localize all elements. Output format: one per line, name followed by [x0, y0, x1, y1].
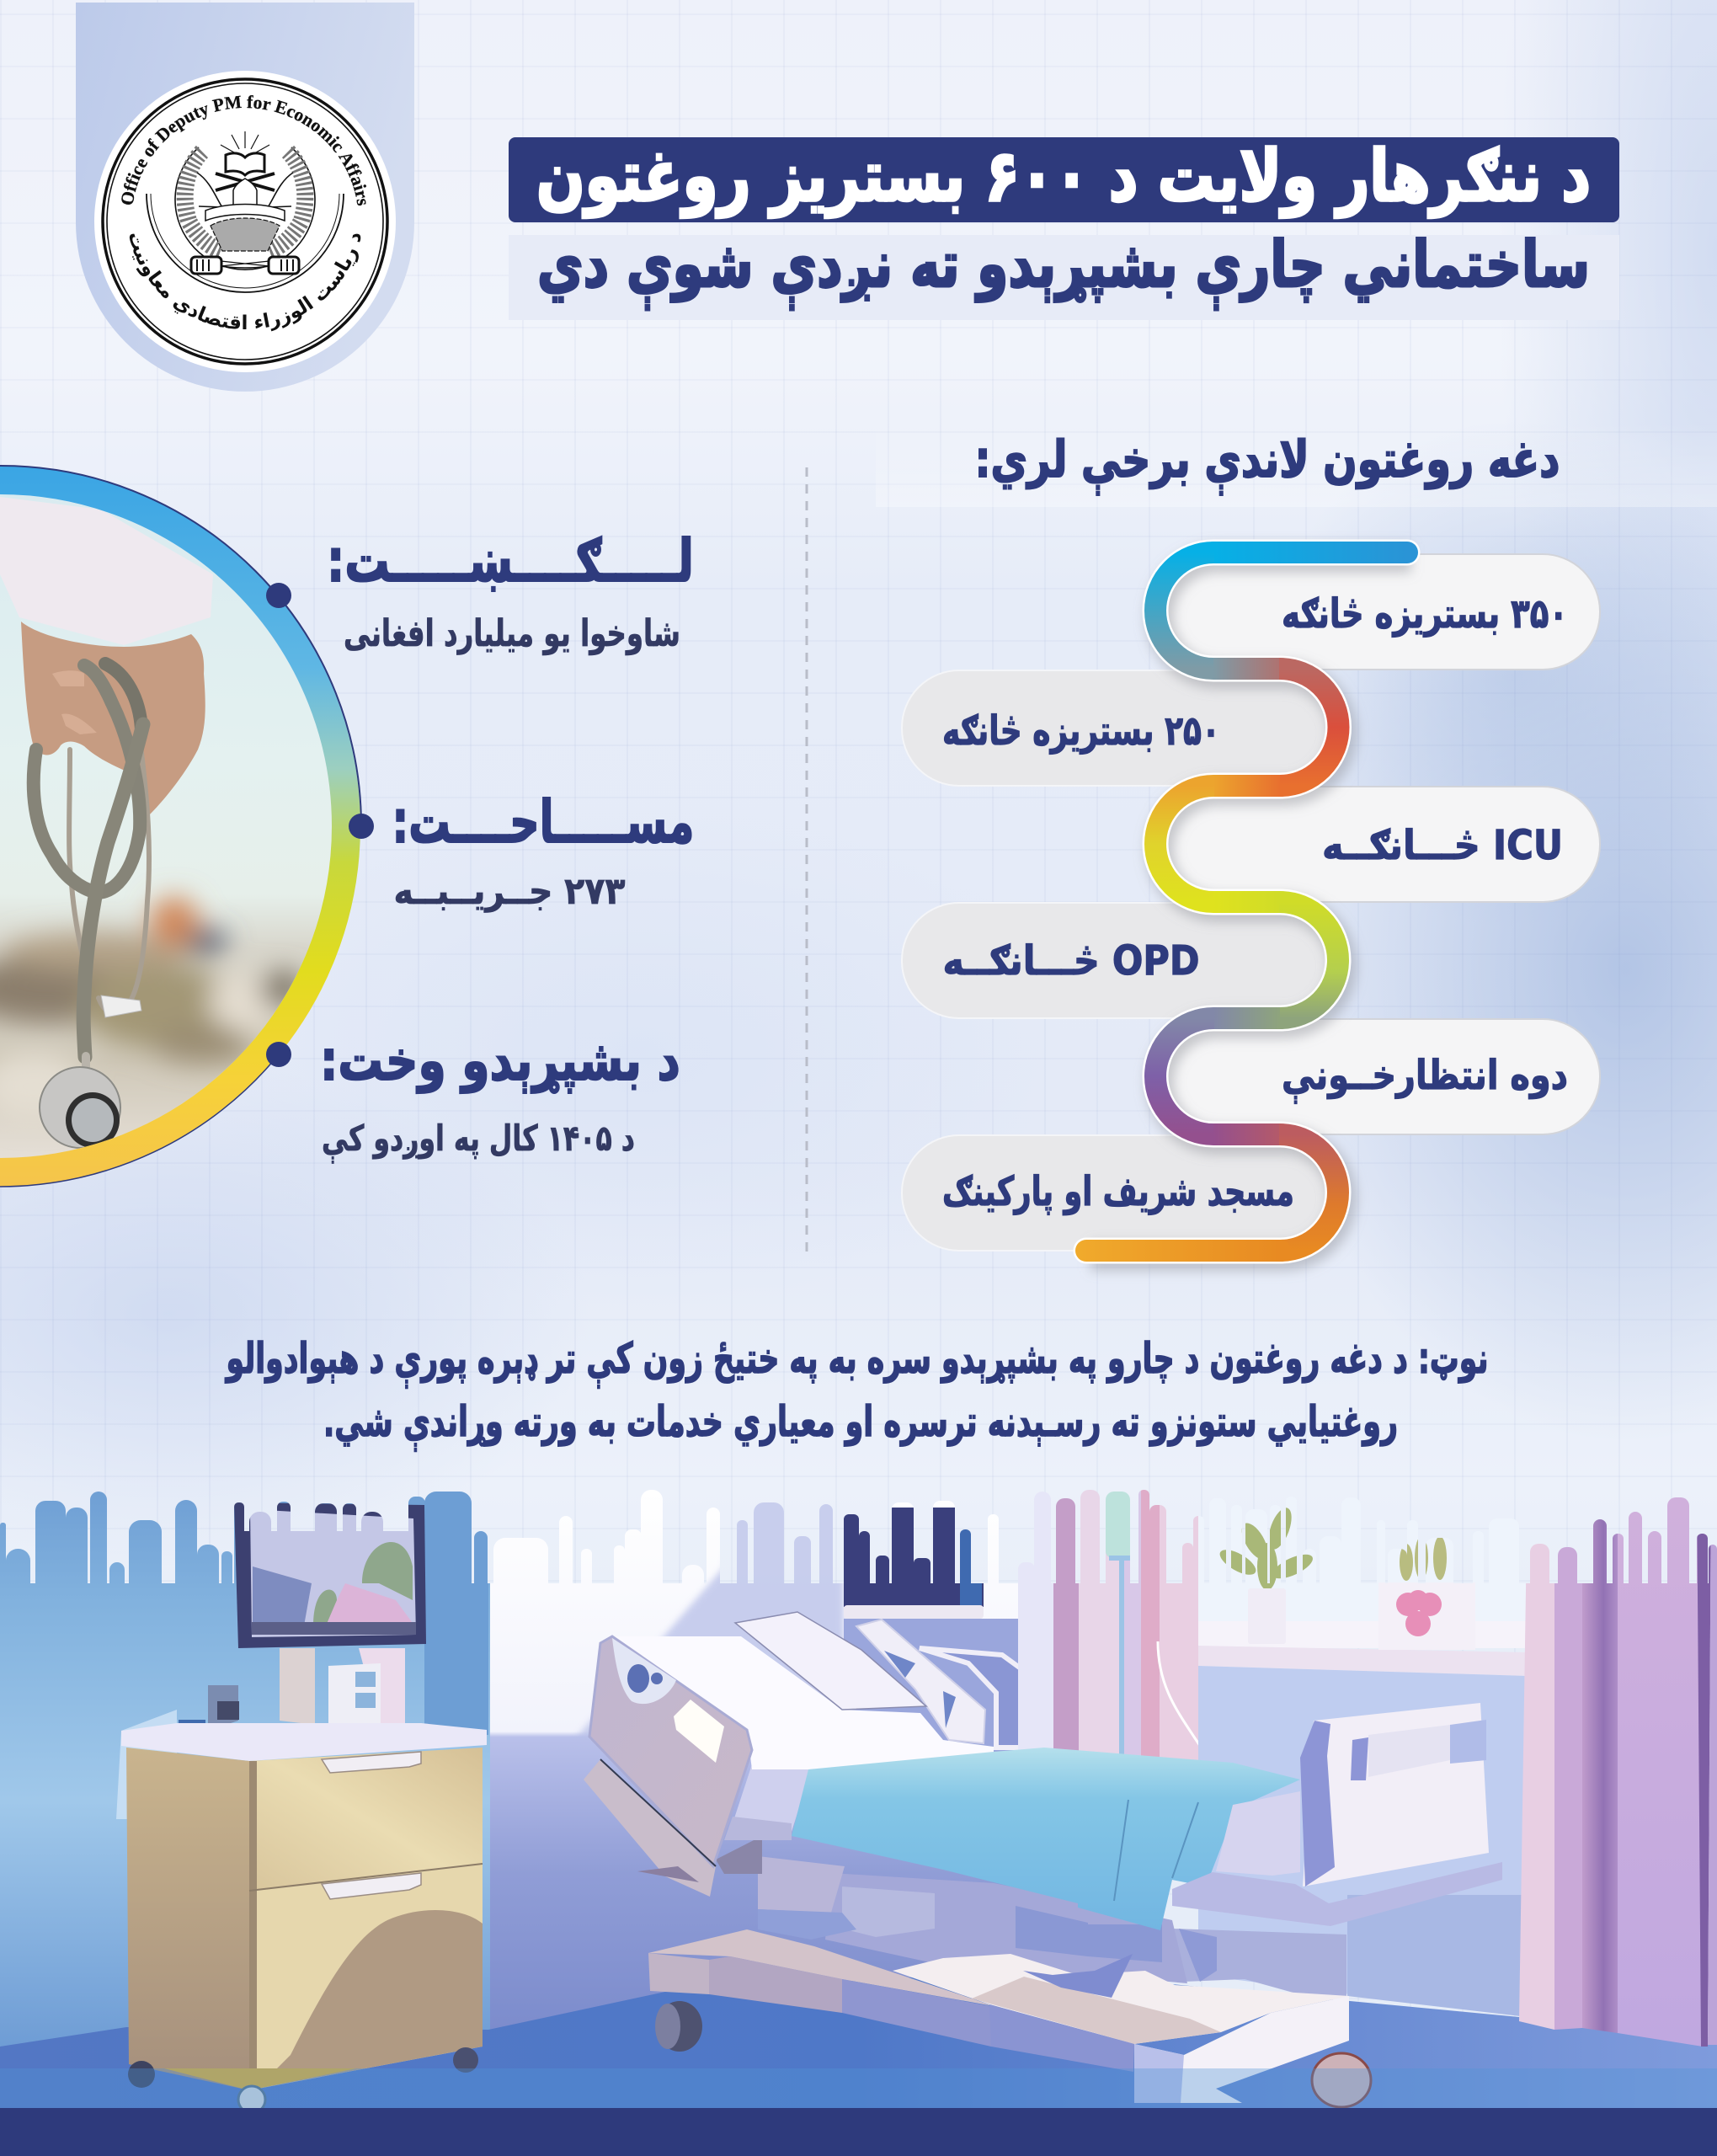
- pill 5: [1162, 1019, 1600, 1134]
- head oval buttons: [627, 1664, 663, 1693]
- hand: [21, 622, 205, 815]
- headboard: [589, 1636, 752, 1866]
- pillow: [735, 1612, 926, 1710]
- department pills with winding line: [902, 552, 1600, 1257]
- cabinet top: [121, 1723, 487, 1761]
- winding line outline: [1086, 552, 1407, 1251]
- coat sleeve: [0, 497, 213, 645]
- middle curtain: [1018, 1482, 1200, 1760]
- emblem: [147, 131, 344, 292]
- back wall lower behind headboard: [844, 1619, 1029, 1753]
- bedside rail far: [920, 1648, 1021, 1748]
- mechanism under bed: [825, 1873, 1187, 1983]
- bottom bar: [0, 2108, 1717, 2156]
- mattress foot: [1216, 1791, 1300, 1876]
- title text: د ننګرهار ولایت د ۶۰۰ بستریز روغتون: [536, 135, 1591, 218]
- title bar: [509, 135, 1619, 222]
- dashed divider: [805, 467, 808, 1258]
- cabinet items: [179, 1502, 426, 1743]
- gradient ring: [0, 480, 346, 1172]
- area heading: مســـــاحــــت:: [392, 787, 694, 857]
- completion heading: د بشپړېدو وخت:: [320, 1028, 680, 1094]
- base front faces: [648, 1953, 709, 1994]
- mattress: [612, 1636, 994, 1769]
- base end block: [1134, 1996, 1349, 2103]
- pill label 2: ۲۵۰ بستریزه څانګه: [942, 707, 1220, 755]
- pill 1: [1162, 554, 1600, 670]
- winding line shadow: [1090, 558, 1411, 1257]
- wall shadows: [575, 1486, 844, 1739]
- head oval plate: [612, 1638, 676, 1704]
- cabinet base: [164, 2068, 356, 2090]
- centre wall: [490, 1490, 1018, 2030]
- floor light band: [0, 2068, 1717, 2109]
- wheel: [657, 2001, 702, 2052]
- cabinet wheels: [128, 2061, 155, 2088]
- drawer handles: [322, 1752, 421, 1899]
- bed platform: [1172, 1862, 1502, 1926]
- upper drawer: [249, 1748, 483, 1891]
- budget heading: لـــــګــــښـــــت:: [327, 526, 694, 595]
- mattress side: [733, 1764, 813, 1832]
- subtitle band: [509, 227, 1619, 320]
- circular photo with stethoscope: [0, 466, 361, 1187]
- logo: Office of Deputy PM for Economic Affairs seal: [94, 71, 396, 372]
- pill label 5: دوه انتظارخــونې: [1282, 1052, 1568, 1104]
- pill 4: [902, 903, 1331, 1018]
- section heading panel: [876, 421, 1717, 507]
- wall window light: [116, 1710, 177, 1819]
- pill label 6: مسجد شریف او پارکینګ: [942, 1168, 1294, 1215]
- left blue wall: [0, 1482, 490, 2072]
- cabinet: [121, 1502, 487, 2113]
- pill label 3: ICU څـــانګــه: [1322, 822, 1563, 869]
- plant: [1219, 1508, 1313, 1588]
- pill 6: [902, 1135, 1331, 1251]
- cabinet side: [126, 1748, 249, 2090]
- pill 3: [1162, 787, 1600, 902]
- dot: completion: [266, 1042, 291, 1067]
- seal bottom text: د ریاست الوزراء اقتصادي معاونیت: [130, 234, 360, 332]
- area value: ۲۷۳ جــریــبــه: [394, 870, 626, 913]
- iv pole: [1106, 1492, 1198, 1754]
- pill label 1: ۳۵۰ بستریزه څانګه: [1282, 590, 1568, 638]
- hospital bed: [584, 1612, 1502, 2107]
- completion value: د ۱۴۰۵ کال په اوږدو کې: [322, 1118, 635, 1164]
- side rail far: [856, 1620, 985, 1743]
- lower drawer shadow: [257, 1910, 483, 2089]
- stethoscope: [34, 664, 149, 1071]
- head lower arm: [584, 1759, 716, 1897]
- logo backing panel: [76, 3, 414, 392]
- base top left: [648, 1929, 994, 2006]
- dot: budget: [266, 583, 291, 608]
- blanket: [792, 1748, 1300, 1930]
- pill 2: [902, 670, 1331, 786]
- back monitor: [844, 1508, 984, 1619]
- lower drawer: [249, 1864, 483, 2090]
- seal top text: Office of Deputy PM for Economic Affairs: [121, 95, 366, 205]
- flower box: [1378, 1536, 1475, 1650]
- floor: [0, 1971, 1717, 2114]
- footboard: [1303, 1703, 1489, 1886]
- section heading: دغه روغتون لاندې برخې لري:: [975, 430, 1560, 495]
- frame column: [758, 1856, 845, 1913]
- dot: area: [349, 814, 374, 839]
- base mechanism right: [1172, 1929, 1346, 1999]
- hospital room illustration: [0, 1482, 1717, 2114]
- budget value: شاوخوا یو میلیارد افغانی: [344, 612, 680, 655]
- photo content: [0, 493, 337, 1166]
- pill label 4: OPD څـــانګــه: [943, 937, 1199, 985]
- right curtain: [1519, 1482, 1717, 2047]
- head hole: [674, 1700, 724, 1763]
- window: [1198, 1482, 1528, 2017]
- note text: [224, 1334, 1489, 1451]
- winding line segments: [1086, 552, 1407, 1251]
- wall behind right of cabinet: [424, 1527, 488, 1735]
- base plate lit: [893, 1954, 1349, 2044]
